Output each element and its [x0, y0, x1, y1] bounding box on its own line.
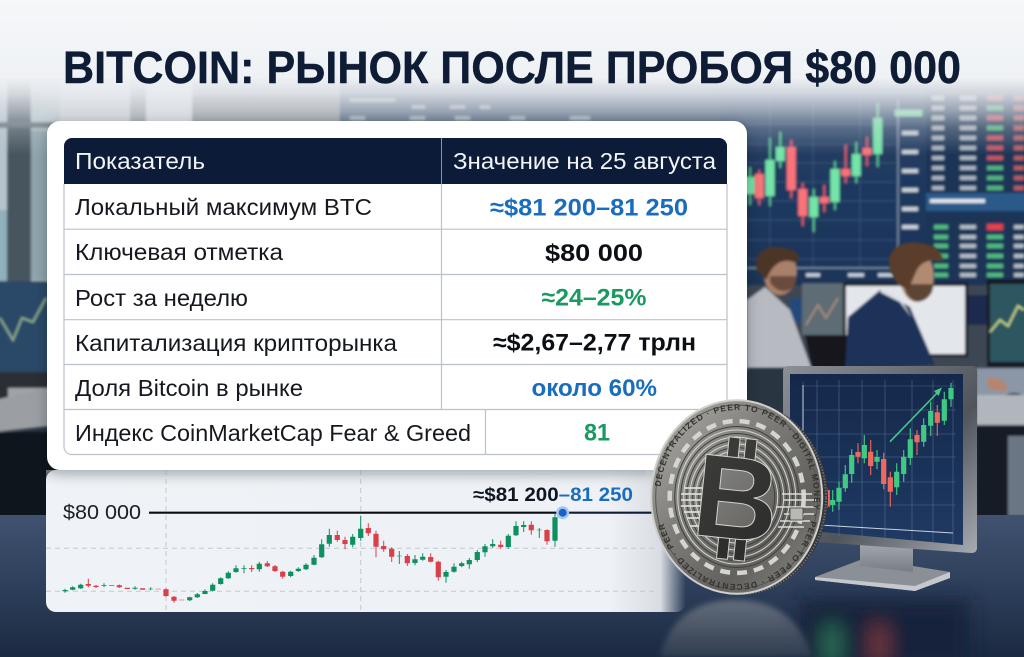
- row: local high: [75, 194, 688, 222]
- background: lower right office: [747, 368, 1024, 517]
- label: local high: ≈$81 200 –81 250: [473, 485, 633, 506]
- screen candlesticks: [827, 383, 951, 512]
- table header: Значение на 25 августа: [453, 148, 716, 174]
- coin ring lettering: DECENTRALIZED · PEER TO PEER · DIGITAL MONEY · PEER TO PEER · DECENTRALIZED · PEER: [654, 404, 820, 590]
- monitor screen: [790, 374, 963, 545]
- background candles: [750, 103, 878, 232]
- label: $80 000: $80 000: [63, 502, 141, 524]
- row: key mark: [75, 239, 643, 267]
- screen grid: [803, 380, 956, 544]
- row: local high: ≈$81 200–81 250: [490, 194, 688, 222]
- row: weekly growth: ≈24–25%: [542, 285, 646, 312]
- row: key mark: $80 000: [545, 240, 643, 267]
- icon: desktop monitor with rising chart: [783, 366, 977, 591]
- $80 000 level line: [149, 512, 562, 514]
- row: bitcoin share: [75, 375, 657, 402]
- table header: Показатель: [75, 148, 205, 174]
- row: key mark: Ключевая отметка: [75, 239, 283, 265]
- coin edge: [656, 402, 828, 594]
- desk reflection: monitor: [800, 600, 970, 657]
- coin reflection: [660, 600, 812, 657]
- row: local high: Локальный максимум BTC: [75, 194, 372, 220]
- row: fear and greed: Индекс CoinMarketCap Fear & Greed: [75, 420, 471, 446]
- top white fade: [0, 0, 1024, 155]
- background: right trading wall screen: [740, 94, 1024, 286]
- background data table: [927, 124, 1024, 190]
- candlesticks: red: [88, 521, 547, 603]
- coin rings: [656, 405, 818, 589]
- table grid: [64, 184, 727, 455]
- table header: [64, 138, 727, 184]
- row: fear and greed: 81: [584, 420, 610, 447]
- background: traders and desks: [720, 242, 1024, 370]
- coin face: [651, 400, 822, 594]
- row: bitcoin share: Доля Bitcoin в рынке: [75, 375, 303, 401]
- row: weekly growth: Рост за неделю: [75, 285, 248, 311]
- trend arrow: [890, 388, 942, 442]
- marker: local high dot: [556, 506, 569, 519]
- row: market cap: ≈$2,67–2,77 трлн: [493, 330, 696, 357]
- row: weekly growth: [75, 285, 646, 312]
- panel: candlestick chart strip: [46, 470, 686, 612]
- row: bitcoin share: около 60%: [532, 375, 657, 402]
- background: middle dark screen top: [339, 96, 720, 121]
- row: market cap: Капитализация крипторынка: [75, 330, 397, 356]
- title: BITCOIN: РЫНОК ПОСЛЕ ПРОБОЯ $80 000: [63, 42, 961, 93]
- monitor stand: [815, 540, 950, 591]
- candlesticks: green: [65, 514, 555, 601]
- row: market cap: [75, 330, 696, 357]
- monitor frame: [783, 366, 977, 553]
- panel: data table card: [47, 121, 747, 470]
- icon: bitcoin coin: [650, 399, 828, 595]
- background: left window and monitor: [0, 80, 342, 522]
- coin chip pad: [790, 508, 803, 520]
- background: desk surface: [0, 515, 1024, 657]
- bitcoin mark: B: [687, 429, 786, 569]
